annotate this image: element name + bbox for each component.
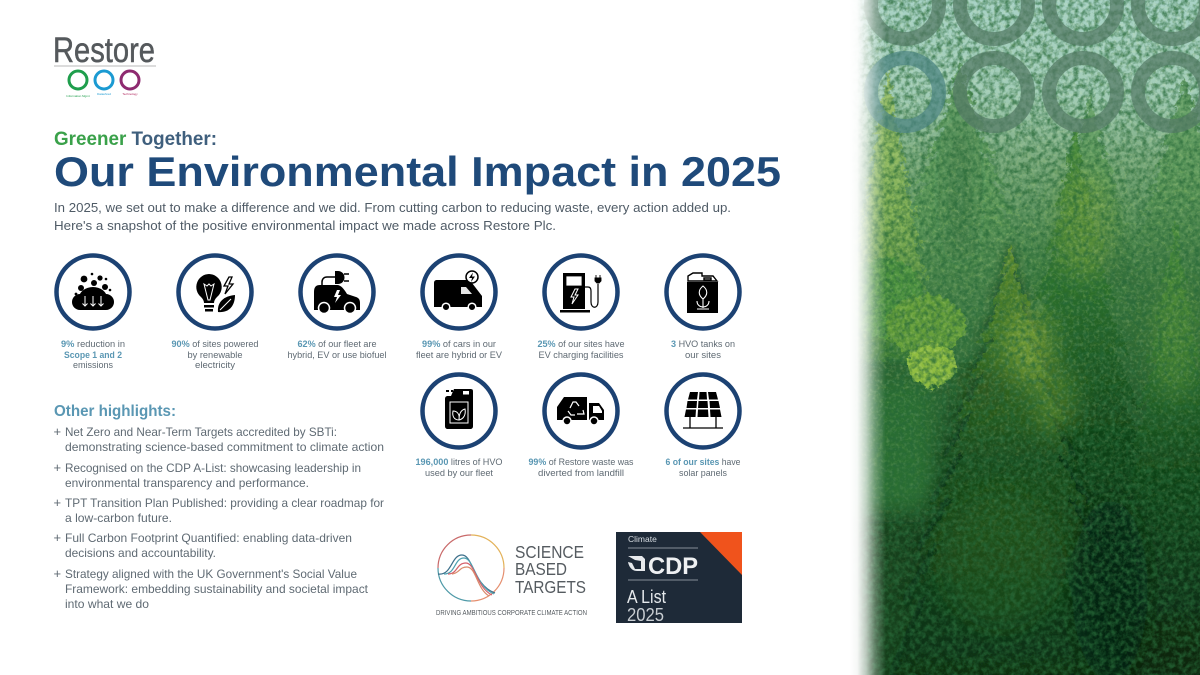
caption: 6 of our sites have bbox=[666, 457, 740, 467]
badge: CDP A List 2025: 2025 bbox=[627, 605, 664, 625]
item: CDP: Recognised on the CDP A-List: showcasing leadership in bbox=[65, 462, 361, 475]
stat: 62% fleet bbox=[288, 256, 386, 360]
item: footprint: + bbox=[54, 530, 61, 545]
stat: 6 solar sites bbox=[666, 374, 740, 478]
logo: Restore: Information Mgmt bbox=[66, 94, 90, 98]
stat: 3 HVO tanks bbox=[666, 256, 740, 360]
forest photograph panel bbox=[838, 0, 1200, 675]
stat: 90% renewable electricity bbox=[172, 256, 258, 370]
shadow behind the main tree bbox=[892, 242, 1088, 675]
heading: Greener Together: Greener Together: bbox=[54, 129, 217, 150]
icon: solar panel bbox=[666, 374, 740, 448]
item: TPT bbox=[54, 495, 384, 525]
item: TPT: + bbox=[54, 495, 61, 510]
icon: charging station bbox=[544, 256, 618, 328]
intro text: Here's a snapshot of the positive environmental impact we made across Restore Plc. bbox=[54, 218, 556, 233]
icon: HVO tank bbox=[666, 256, 740, 328]
stat: 90% renewable electricity: by renewable bbox=[188, 350, 242, 360]
stat: 25% charging bbox=[538, 256, 624, 360]
icon: plug-in car bbox=[300, 256, 374, 328]
item: social value: Framework: embedding sustainability and societal impact bbox=[65, 583, 369, 596]
badge: CDP A List 2025: Climate bbox=[628, 534, 657, 544]
badge: CDP A List 2025: CDP bbox=[648, 553, 698, 580]
logo: Science Based Targets bbox=[436, 535, 587, 617]
list: highlights bbox=[54, 424, 384, 611]
SBT ring and curves bbox=[438, 535, 504, 601]
logo: Science Based Targets: BASED bbox=[515, 559, 567, 579]
badge: CDP A List 2025: A List bbox=[627, 587, 666, 607]
caption: 25% of our sites have bbox=[538, 339, 624, 349]
item: TPT: TPT Transition Plan Published: providing a clear roadmap for bbox=[65, 497, 384, 510]
logo: Restore: Datashred bbox=[97, 92, 111, 96]
item: SBTi: Net Zero and Near-Term Targets accredited by SBTi: bbox=[65, 426, 337, 439]
stat: 25% charging: EV charging facilities bbox=[538, 350, 624, 360]
title: Our Environmental Impact in 2025 bbox=[54, 148, 781, 195]
stat: 3 HVO tanks: our sites bbox=[685, 350, 721, 360]
branch texture bbox=[875, 151, 1200, 548]
item: footprint: decisions and accountability. bbox=[65, 547, 216, 560]
logo: Restore: Restore bbox=[53, 31, 155, 70]
logo: Restore: Technology bbox=[122, 92, 138, 96]
stat: 99% cars bbox=[416, 256, 503, 360]
badge: CDP A List 2025 bbox=[616, 532, 742, 625]
soft light and shadow on the trees bbox=[940, 120, 1197, 675]
item: social value: + bbox=[54, 566, 61, 581]
item: CDP: + bbox=[54, 460, 61, 475]
item: social value bbox=[54, 566, 369, 611]
item: social value: Strategy aligned with the UK Government's Social Value bbox=[65, 568, 357, 581]
icon: HVO jerry can bbox=[422, 374, 496, 448]
caption: 90% of sites powered bbox=[172, 339, 258, 349]
icon: cloud with down arrows bbox=[56, 256, 130, 328]
logo: Science Based Targets: DRIVING AMBITIOUS CORPORATE CLIMATE ACTION bbox=[436, 608, 587, 617]
logo: Science Based Targets: SCIENCE bbox=[515, 542, 584, 562]
caption: 196,000 litres of HVO bbox=[416, 457, 502, 467]
item: SBTi: demonstrating science-based commitment to climate action bbox=[65, 441, 384, 454]
stat: 196,000 litres: used by our fleet bbox=[425, 468, 493, 478]
stat: 90% renewable electricity: electricity bbox=[195, 360, 235, 370]
item: social value: into what we do bbox=[65, 598, 149, 611]
caption: 62% of our fleet are bbox=[298, 339, 376, 349]
stat: 9% reduction in emissions bbox=[56, 256, 130, 370]
stat: 62% fleet: hybrid, EV or use biofuel bbox=[288, 350, 386, 360]
icon: electric van bbox=[422, 256, 496, 328]
decorative ring pattern bbox=[871, 0, 1200, 126]
icon: light bulb with leaf bbox=[178, 256, 252, 328]
intro text: In 2025, we set out to make a difference and we did. From cutting carbon to reducing waste, every action added up. bbox=[54, 200, 731, 215]
caption: 99% of Restore waste was bbox=[528, 457, 634, 467]
item: CDP bbox=[54, 460, 361, 490]
stat: 9% reduction in emissions: emissions bbox=[73, 360, 113, 370]
icon: recycling truck bbox=[544, 374, 618, 448]
stat: 196,000 litres bbox=[416, 374, 502, 478]
stat: 99% waste: diverted from landfill bbox=[538, 468, 624, 478]
logo: Restore bbox=[53, 31, 156, 98]
item: SBTi bbox=[54, 424, 384, 454]
intro text bbox=[54, 200, 731, 233]
stat: 99% waste bbox=[528, 374, 634, 478]
heading: Other highlights: Other highlights: bbox=[54, 403, 176, 420]
item: footprint bbox=[54, 530, 352, 560]
item: CDP: environmental transparency and performance. bbox=[65, 477, 309, 490]
item: TPT: a low-carbon future. bbox=[65, 512, 172, 525]
caption: 9% reduction in bbox=[61, 339, 125, 349]
stat: 6 solar sites: solar panels bbox=[679, 468, 727, 478]
logo: Science Based Targets: TARGETS bbox=[515, 577, 586, 597]
caption: 3 HVO tanks on bbox=[671, 339, 735, 349]
item: SBTi: + bbox=[54, 424, 61, 439]
stat: 99% cars: fleet are hybrid or EV bbox=[416, 350, 503, 360]
caption: 99% of cars in our bbox=[422, 339, 496, 349]
stat: 9% reduction in emissions: Scope 1 and 2 bbox=[64, 350, 122, 360]
item: footprint: Full Carbon Footprint Quantified: enabling data-driven bbox=[65, 532, 352, 545]
